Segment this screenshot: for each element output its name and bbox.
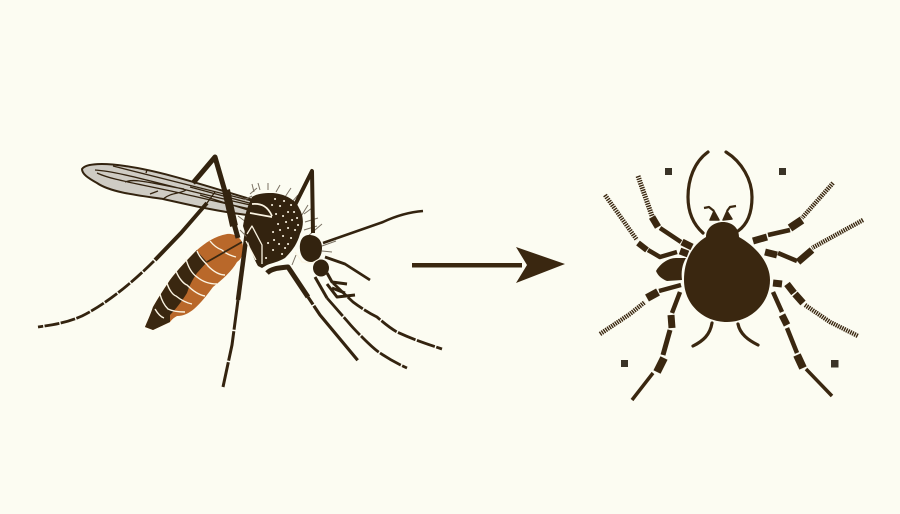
tick mouthparts (704, 206, 736, 220)
tick front feelers (688, 152, 752, 233)
tick illustration (600, 152, 863, 400)
tick upper right legs (753, 183, 863, 262)
tick side lobe (656, 258, 686, 281)
tick lower left legs (600, 285, 681, 400)
mosquito hind legs (38, 157, 248, 387)
mosquito abdomen (145, 234, 243, 330)
arrow from mosquito to tick (412, 247, 565, 283)
mosquito wing (82, 164, 264, 217)
mosquito antenna and palps (323, 211, 423, 297)
square markers (621, 168, 838, 368)
mosquito head (295, 235, 329, 276)
mosquito thorax (238, 183, 336, 268)
mosquito forelegs (267, 171, 442, 368)
tick lower right legs (773, 283, 858, 396)
tick rear appendages (693, 323, 758, 346)
tick body (684, 222, 770, 322)
tick upper left legs (605, 176, 692, 257)
mosquito illustration (38, 157, 442, 387)
